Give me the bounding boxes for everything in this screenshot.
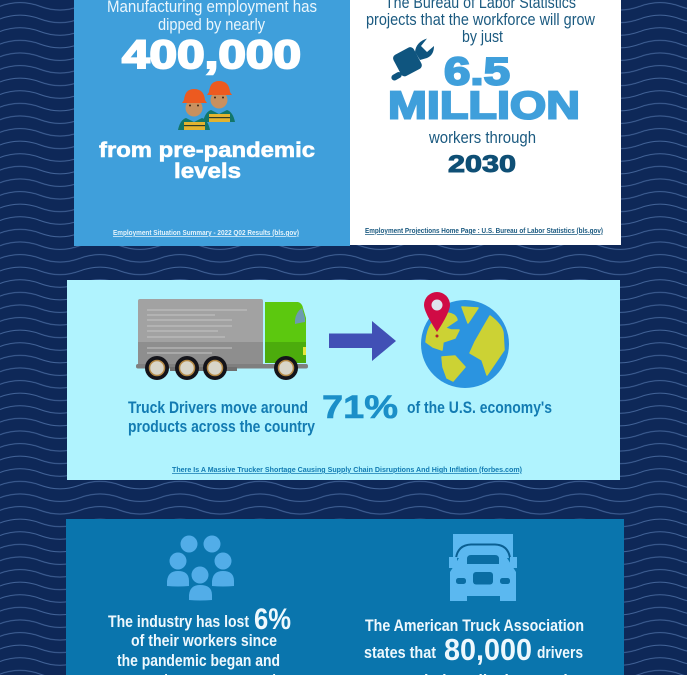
text: bureau of labor statistics intro: projects that the workforce will grow [366, 11, 595, 29]
text: from pre-pandemic levels [99, 139, 315, 183]
panel: manufacturing employment [74, 0, 350, 246]
icon: two workers in hard hats [178, 81, 235, 130]
panel: truck drivers [67, 280, 620, 480]
icon: globe with location pin [421, 292, 509, 388]
number: 71%: 71% [322, 389, 398, 425]
icon: wrench and plug [390, 38, 434, 82]
text: american truck association [364, 616, 584, 675]
text: from pre-pandemic levels: levels [174, 160, 241, 183]
number: 400,000: 400,000 [122, 33, 301, 77]
number: 6%: 6% [254, 603, 291, 636]
source link: There Is A Massive Trucker Shortage Causing Supply Chain Disruptions And High Inflation (forbes.com) [172, 465, 522, 474]
arrow [329, 321, 396, 361]
icon: front view truck [449, 534, 517, 601]
text: industry has lost 6%: of their workers since [131, 632, 277, 650]
source link: Employment Situation Summary - 2022 Q02 Results (bls.gov) [113, 228, 299, 237]
panel: workforce projection [350, 0, 621, 245]
text: bureau of labor statistics intro [366, 0, 595, 46]
icon: group of people [167, 536, 234, 600]
source link: Employment Projections Home Page : U.S. Bureau of Labor Statistics (bls.gov) [365, 226, 603, 235]
text: industry has lost 6%: The industry has lost [108, 613, 249, 631]
icon: truck [136, 299, 308, 380]
text: industry has lost 6% [108, 603, 291, 675]
number: 2030: 2030 [448, 151, 516, 178]
text: truck drivers move around [128, 399, 316, 436]
text: manufacturing employment intro: dipped by nearly [158, 15, 265, 34]
text: american truck association: drivers [537, 643, 583, 662]
text: american truck association: The American Truck Association [365, 616, 584, 635]
number: 80,000: 80,000 [444, 632, 532, 667]
number: 6.5: 6.5 [444, 50, 510, 94]
text: from pre-pandemic levels: from pre-pandemic [99, 139, 315, 162]
text: bureau of labor statistics intro: by just [462, 28, 503, 46]
text: truck drivers move around: products across the country [128, 418, 316, 436]
text: american truck association: states that [364, 643, 436, 662]
text: industry has lost 6%: the pandemic began and [117, 652, 280, 670]
number: million: MILLION [388, 84, 580, 128]
text: manufacturing employment intro [107, 0, 317, 34]
text: of the U.S. economy's: of the U.S. economy's [407, 399, 552, 417]
text: truck drivers move around: Truck Drivers move around [128, 399, 308, 417]
text: workers through: workers through [428, 128, 536, 147]
panel: workers lost and drivers needed [66, 519, 624, 675]
